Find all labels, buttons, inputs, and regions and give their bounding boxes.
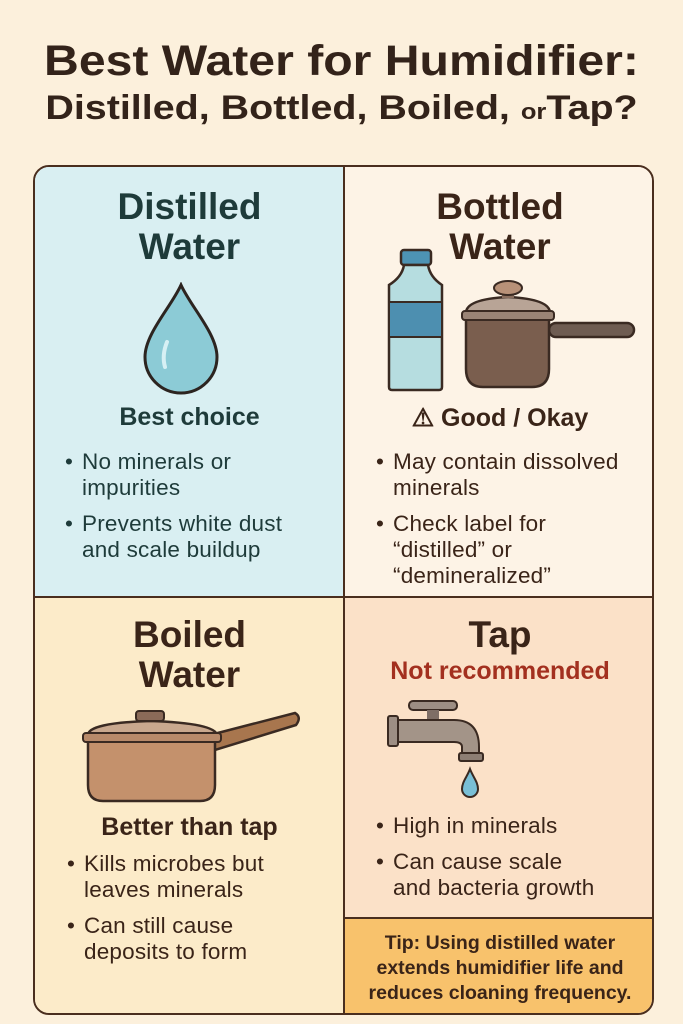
heading: distilled water: Distilled	[118, 186, 261, 227]
panel: distilled	[35, 167, 344, 597]
callout: tip	[344, 917, 656, 1017]
bullets: distilled	[66, 449, 282, 562]
callout: tip: Tip: Using distilled water	[385, 932, 615, 954]
panel: boiled	[35, 597, 344, 1017]
panel: bottled	[344, 167, 656, 597]
bullets: bottled: “demineralized”	[393, 563, 551, 588]
bullets: boiled: Can still cause	[84, 913, 233, 938]
panel: tap	[344, 597, 656, 917]
heading: bottled water: Water	[449, 226, 551, 267]
bullets: tap: and bacteria growth	[393, 875, 594, 900]
subheading: better than tap: Better than tap	[101, 813, 278, 841]
title	[44, 37, 639, 127]
callout: tip: reduces cloaning frequency.	[369, 982, 631, 1004]
bullets: distilled: Prevents white dust	[82, 511, 282, 536]
heading: bottled water: Bottled	[436, 186, 564, 227]
heading: bottled water	[436, 186, 564, 267]
heading: boiled water: Water	[139, 654, 240, 695]
bullets: bottled	[376, 449, 619, 588]
heading: distilled water: Water	[139, 226, 240, 267]
heading: tap: Tap	[468, 614, 532, 655]
subheading: best choice: Best choice	[119, 403, 260, 431]
icon: pot	[82, 710, 300, 802]
grid panel	[33, 165, 654, 1015]
icon: bottle and pot	[388, 248, 636, 392]
bullets: bottled: May contain dissolved	[393, 449, 619, 474]
bullets: tap: High in minerals	[393, 813, 558, 838]
icon: faucet	[387, 700, 484, 798]
title: Distilled, Bottled, Boiled, orTap?	[45, 89, 638, 127]
bullets: boiled: deposits to form	[84, 939, 247, 964]
icon: water drop	[144, 282, 218, 394]
callout: tip: extends humidifier life and	[376, 957, 624, 979]
heading: distilled water	[118, 186, 261, 267]
horizontal divider	[35, 596, 656, 598]
subheading: good / okay: ⚠ Good / Okay	[412, 404, 588, 432]
bullets: bottled: Check label for	[393, 511, 546, 536]
bullets: bottled: minerals	[393, 475, 480, 500]
bullets: tap	[376, 813, 594, 900]
heading: boiled water: Boiled	[133, 614, 246, 655]
bullets: distilled: impurities	[82, 475, 180, 500]
bullets: boiled: Kills microbes but	[84, 851, 264, 876]
bullets: bottled: “distilled” or	[393, 537, 512, 562]
bullets: distilled: No minerals or	[82, 449, 231, 474]
heading: boiled water	[133, 614, 246, 695]
bullets: boiled	[68, 851, 264, 964]
title: Best Water for Humidifier:	[44, 37, 639, 85]
bullets: tap: Can cause scale	[393, 849, 562, 874]
bullets: distilled: and scale buildup	[82, 537, 261, 562]
vertical divider	[343, 167, 345, 1017]
bullets: boiled: leaves minerals	[84, 877, 243, 902]
subheading: not recommended: Not recommended	[390, 657, 610, 685]
